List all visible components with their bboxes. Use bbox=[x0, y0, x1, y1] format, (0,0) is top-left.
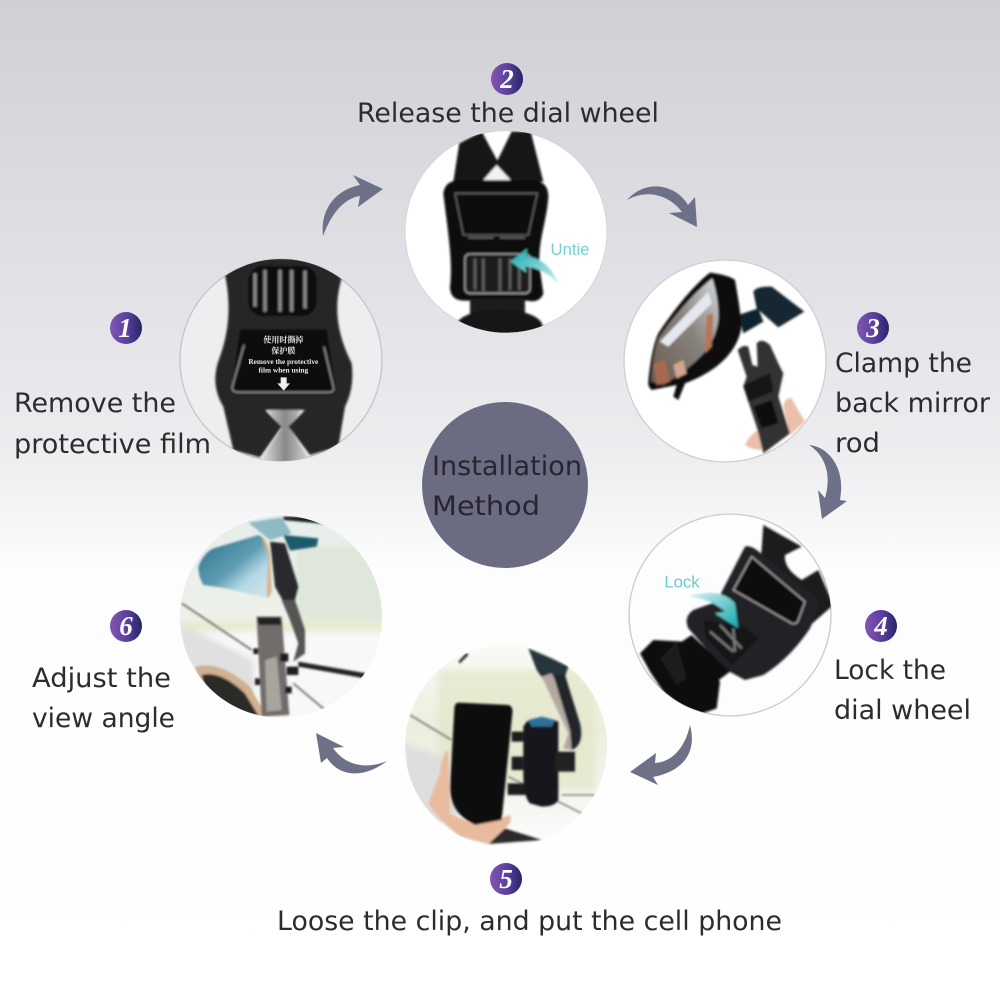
center circle: Installation Method: Method bbox=[432, 491, 540, 522]
step 2 photo: dial wheel with Untie label bbox=[405, 131, 607, 344]
caption: step 5: Loose the clip, and put the cell phone bbox=[277, 906, 782, 937]
badge: step 3 bbox=[857, 312, 889, 344]
caption: step 3: rod bbox=[835, 428, 880, 459]
badge: step 5 bbox=[490, 863, 522, 895]
step 5 photo: phone placed in holder bbox=[405, 648, 607, 846]
step 1 photo: protective film: Remove the protective bbox=[248, 357, 319, 366]
step 1 photo: protective film bbox=[180, 258, 382, 463]
arrow: step 1 to 2 bbox=[323, 175, 383, 236]
step 4 photo: dial lock with Lock label: Lock bbox=[664, 572, 700, 591]
caption: step 3: back mirror bbox=[835, 388, 991, 419]
arrow: step 2 to 3 bbox=[627, 186, 697, 227]
step 1 photo: protective film: 保护膜 bbox=[271, 345, 295, 355]
arrow: step 3 to 4 bbox=[809, 445, 847, 519]
badge: step 4 bbox=[865, 610, 897, 642]
badge: step 6 bbox=[110, 610, 142, 642]
caption: step 4: dial wheel bbox=[834, 695, 971, 726]
step 4 photo: dial lock with Lock label bbox=[629, 514, 833, 717]
step 1 photo: protective film: film when using bbox=[258, 366, 309, 375]
caption: step 1: Remove the bbox=[14, 388, 176, 419]
step 1 photo: protective film: 使用时撕掉 bbox=[263, 334, 303, 344]
step 3 photo: mirror and clip bbox=[624, 260, 826, 462]
caption: step 1 bbox=[14, 388, 211, 460]
badge: step 1: 1 bbox=[118, 313, 132, 343]
caption: step 6: view angle bbox=[32, 703, 175, 734]
caption: step 3: Clamp the bbox=[835, 348, 972, 379]
badge: step 2 bbox=[491, 63, 523, 95]
badge: step 1 bbox=[110, 312, 142, 344]
caption: step 6 bbox=[32, 663, 175, 734]
step 2 photo: dial wheel with Untie label: Untie bbox=[551, 240, 589, 259]
badge: step 4: 4 bbox=[873, 611, 888, 641]
caption: step 2: Release the dial wheel bbox=[357, 98, 659, 129]
caption: step 4 bbox=[834, 655, 971, 726]
badge: step 2: 2 bbox=[499, 64, 514, 94]
center circle: Installation Method bbox=[422, 402, 588, 568]
badge: step 6: 6 bbox=[119, 611, 133, 641]
caption: step 1: protective film bbox=[14, 429, 211, 460]
arrow: step 4 to 5 bbox=[630, 725, 692, 785]
center circle: Installation Method: Installation bbox=[432, 451, 582, 482]
caption: step 6: Adjust the bbox=[32, 663, 171, 694]
caption: step 3 bbox=[835, 348, 991, 459]
caption: step 4: Lock the bbox=[834, 655, 946, 686]
badge: step 3: 3 bbox=[865, 313, 880, 343]
step 6 photo: adjusted phone on mirror bbox=[180, 516, 382, 718]
arrow: step 5 to 6 bbox=[316, 733, 387, 773]
badge: step 5: 5 bbox=[499, 864, 513, 894]
